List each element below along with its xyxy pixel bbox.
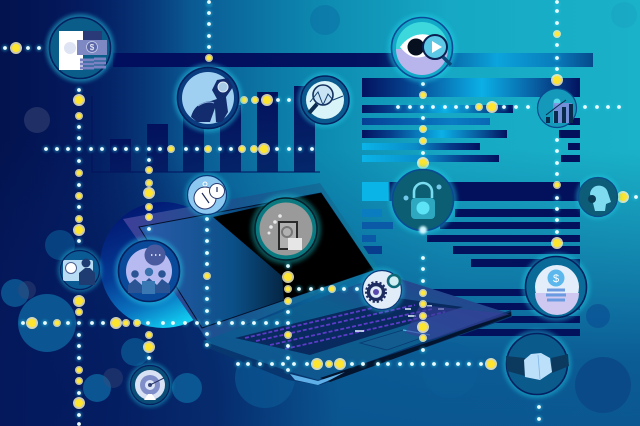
bar chart	[92, 86, 320, 172]
black screen area	[213, 193, 373, 300]
yellow dot halos	[57, 34, 557, 381]
front edge	[203, 310, 512, 385]
icon: money and phone	[46, 14, 114, 82]
icon: head profile	[576, 175, 620, 219]
horizontal data bars	[113, 53, 593, 336]
icon: coins and dollar	[522, 253, 590, 321]
yellow dots	[57, 34, 557, 381]
laptop	[123, 183, 512, 385]
icon: money and phone: $	[90, 43, 95, 52]
half circle behind laptop	[100, 202, 226, 328]
icon: team and speech bubble	[115, 237, 183, 305]
icon: coins and dollar: $	[553, 273, 559, 285]
icon: target	[128, 363, 172, 407]
large yellow dot halos	[16, 48, 623, 403]
laptop base	[203, 274, 511, 384]
icon: head and gear idea	[174, 64, 242, 132]
icon: eye and magnifier	[388, 14, 456, 82]
touchpad	[360, 330, 430, 350]
icon: magnified chart	[298, 73, 352, 127]
laptop screen	[139, 193, 373, 328]
keyboard	[235, 298, 463, 355]
laptop lid	[123, 183, 378, 341]
icon: gears	[360, 268, 404, 312]
purple deck shade	[405, 305, 510, 340]
icon: handshake	[503, 330, 571, 398]
icon: padlock	[389, 166, 457, 234]
icon: stopwatches	[185, 173, 229, 217]
icon: growth chart	[538, 88, 576, 128]
large yellow dots	[16, 48, 623, 403]
icon: tablet touch	[251, 194, 321, 264]
icon: presenter	[58, 248, 102, 292]
